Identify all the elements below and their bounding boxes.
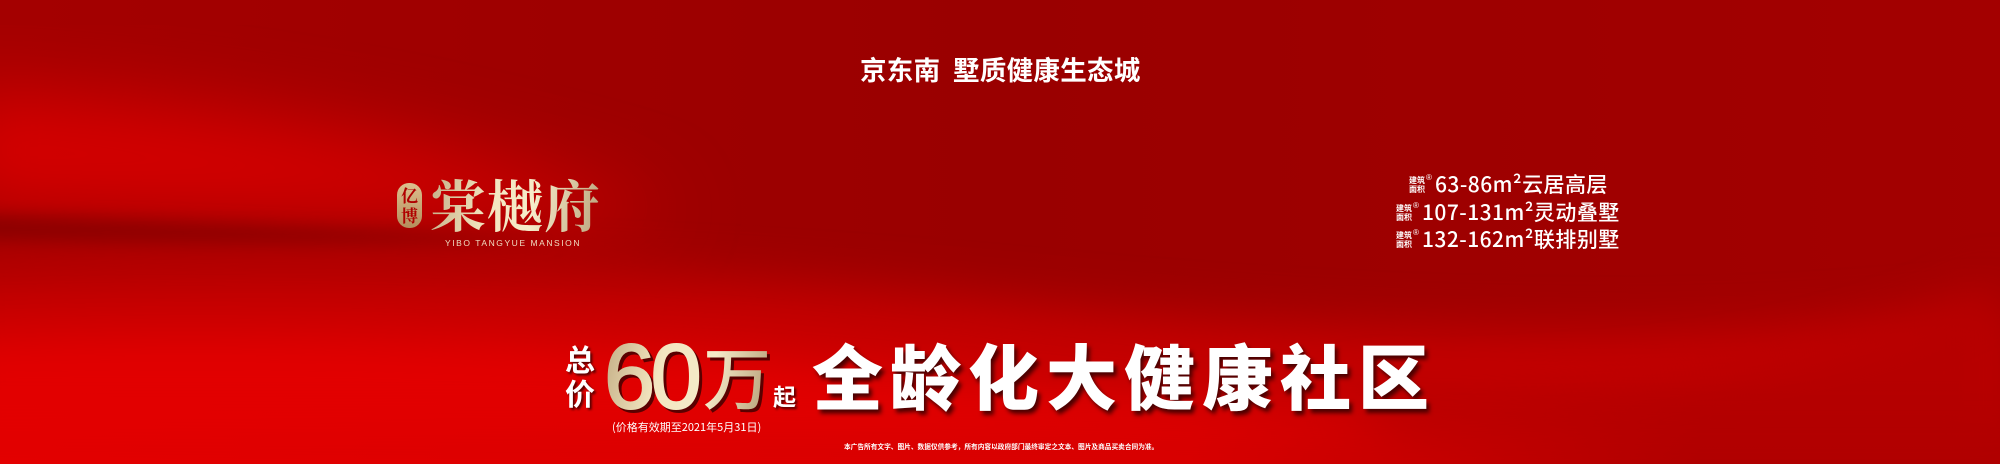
heading: tagline: 京东南 墅质健康生态城 [860, 49, 1141, 88]
price block [565, 325, 799, 435]
spec row 2: ® [1413, 201, 1419, 210]
price figure: 万 [706, 328, 774, 427]
price figure: 60 [604, 326, 699, 428]
validity note: (价格有效期至2021年5月31日) [612, 419, 761, 435]
disclaimer: 本广告所有文字、图片、数据仅供参考，所有内容以政府部门最终审定之文本、图片及商品买卖合同为准。 [844, 441, 1158, 451]
price label: 总价 [565, 336, 595, 414]
spec row 2: 107-131m²灵动叠墅 [1422, 197, 1620, 227]
price suffix: 起 [773, 378, 796, 412]
price figure: 60 [607, 329, 702, 431]
price figure: 万 [703, 325, 771, 424]
spec row 3: 建筑面积 [1396, 230, 1412, 250]
spec row 2: 建筑面积 [1396, 203, 1412, 223]
headline: 全龄化大健康社区 [812, 323, 1436, 425]
icon: Yibo seal [397, 183, 422, 228]
logo: Yibo Tangyue Mansion [397, 164, 601, 248]
logo wordmark: 棠樾府 [430, 164, 601, 244]
spec row 1: 建筑面积 [1409, 175, 1425, 195]
logo English name: YIBO TANGYUE MANSION [445, 238, 581, 248]
icon: Yibo seal: 亿博 [401, 182, 418, 227]
spec row 1: ® [1426, 173, 1432, 182]
spec row 3: ® [1413, 228, 1419, 237]
price figure [604, 325, 774, 431]
spec row 3: 132-162m²联排别墅 [1422, 224, 1620, 254]
specs: floor area list [1396, 169, 1620, 254]
spec row 1: 63-86m²云居高层 [1435, 169, 1608, 199]
